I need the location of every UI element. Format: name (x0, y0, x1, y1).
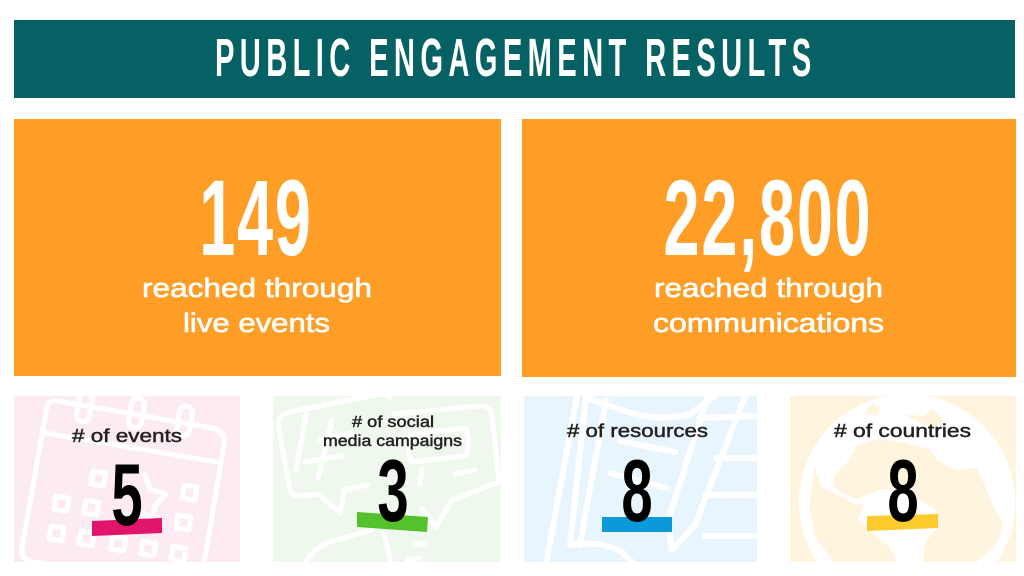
highlight bar: green (357, 512, 428, 532)
number: 3: 3 (377, 441, 409, 540)
icon: globe (799, 394, 1015, 562)
label: # of social media campaigns: # of social (352, 414, 434, 431)
highlight bar: yellow (867, 514, 938, 531)
number: 22,800: 22,800 (664, 157, 872, 278)
title: PUBLIC ENGAGEMENT RESULTS (215, 29, 811, 88)
text: reached through live events: reached through (142, 273, 372, 303)
label: # of social media campaigns (323, 414, 462, 450)
icon: calendar (22, 391, 224, 570)
panel: countries (790, 394, 1016, 562)
label: # of events: # of events (72, 426, 182, 446)
label: # of resources: # of resources (567, 421, 708, 441)
title banner (14, 20, 1015, 98)
text: reached through communications: reached through (654, 273, 883, 303)
text: reached through communications (653, 273, 884, 338)
number: 149: 149 (199, 157, 313, 278)
text: reached through communications: communications (653, 308, 884, 338)
label: # of countries: # of countries (834, 421, 971, 441)
number: 8: 8 (621, 441, 653, 540)
highlight bar: blue (602, 517, 672, 532)
number: 5: 5 (111, 445, 143, 544)
panel: social media campaigns (273, 394, 501, 565)
number: 8: 8 (887, 441, 919, 540)
panel: communications (522, 119, 1016, 377)
text: reached through live events: live events (183, 308, 330, 338)
icon: book (545, 396, 760, 570)
highlight bar: pink (92, 518, 162, 536)
text: reached through live events (142, 273, 372, 338)
icon: hashtag speech bubbles and megaphone (278, 394, 499, 565)
label: # of social media campaigns: media campaigns (323, 433, 462, 450)
panel: live events (14, 119, 501, 376)
panel: resources (524, 396, 760, 570)
panel: events (14, 391, 240, 570)
